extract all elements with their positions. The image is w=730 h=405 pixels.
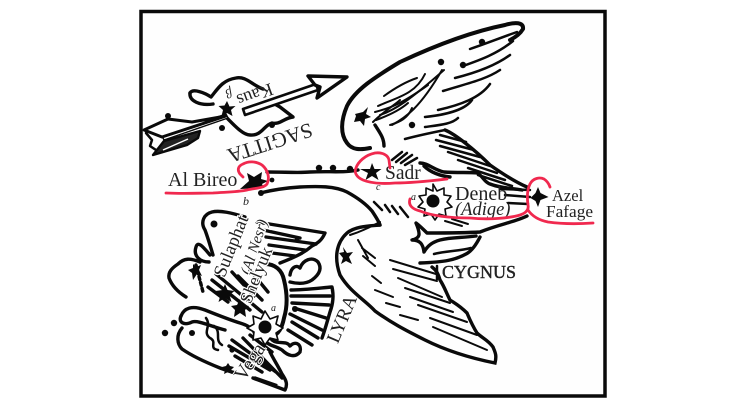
bottom-right tuft [266, 340, 300, 356]
label: Kaus: Kaus [234, 79, 276, 111]
red annotation: Deneb underline [409, 178, 550, 219]
constellation: Sagitta arrow [144, 76, 347, 155]
label: Azel: Azel [552, 186, 584, 205]
top-right tuft [290, 259, 320, 283]
label: small letter near Al Bireo: b [243, 194, 249, 208]
label: Shelyuk: Shelyuk [236, 244, 276, 306]
top wing blob [203, 211, 245, 255]
red annotation: Azel Fafage underline [528, 210, 593, 224]
label: LYRA: LYRA [323, 292, 362, 346]
upper right wing [257, 222, 325, 263]
label: SAGITTA: SAGITTA [224, 118, 316, 168]
arrow fletching [144, 113, 226, 155]
label: Sadr: Sadr [385, 163, 421, 184]
ribbon stars [219, 122, 275, 131]
scroll ornament [206, 318, 222, 350]
label: Adige: (Adige) [455, 200, 510, 220]
right wing fan [288, 287, 333, 345]
band loop [180, 316, 225, 330]
lower left wing [178, 328, 240, 374]
central arch [265, 264, 287, 338]
left band [181, 308, 255, 336]
swan back [420, 163, 522, 190]
label: Al Bireo: Al Bireo [168, 169, 237, 191]
upper wing small feathers [373, 70, 444, 146]
red annotation: Al Bireo underline and circle [166, 162, 268, 193]
red annotation: Sadr underline and circle [355, 153, 447, 183]
label: Al Nasr: (Al Nesr) [238, 217, 271, 277]
label: small alpha near Vega: a [271, 303, 276, 314]
feather hatch marks below neck [374, 202, 408, 217]
label: small letter near Sadr: c [376, 182, 381, 193]
swan neck [260, 170, 380, 225]
tail hatching [436, 135, 530, 204]
wing stars [339, 39, 485, 264]
label: Greek letter: β [223, 85, 236, 102]
lower wing outline [337, 225, 496, 363]
label: Fafage: Fafage [546, 202, 593, 221]
Deneb star [418, 184, 452, 220]
arrow ribbon [190, 78, 293, 135]
Azel Fafage star [530, 187, 548, 207]
label: small letter near Deneb: a [411, 192, 416, 203]
Lyra stars [162, 220, 298, 374]
eagle head [169, 259, 200, 297]
chart frame [141, 12, 605, 396]
Vega star [247, 311, 283, 345]
neck stars [258, 165, 353, 196]
label: CYGNUS: CYGNUS [442, 262, 516, 282]
label: Sulaphat: Sulaphat [211, 212, 254, 280]
Al Bireo star [240, 172, 268, 189]
left curl [195, 244, 210, 262]
constellation: Cygnus swan [240, 23, 548, 363]
swan body and feet [412, 216, 527, 263]
arrow head [308, 76, 347, 98]
upper wing primary feathers [405, 32, 527, 187]
lower wing feathers [350, 222, 487, 350]
wing-root feather tufts [392, 152, 417, 165]
arrow shaft [162, 84, 318, 140]
label: Vega: Vega [230, 339, 270, 385]
upper wing outline [342, 23, 523, 149]
Sadr star [360, 163, 382, 180]
Kaus star [218, 101, 236, 116]
label: Deneb: Deneb [455, 183, 507, 205]
body hatching [196, 265, 268, 312]
constellation: Lyra eagle [162, 211, 333, 390]
lower tail feathers [229, 335, 286, 390]
